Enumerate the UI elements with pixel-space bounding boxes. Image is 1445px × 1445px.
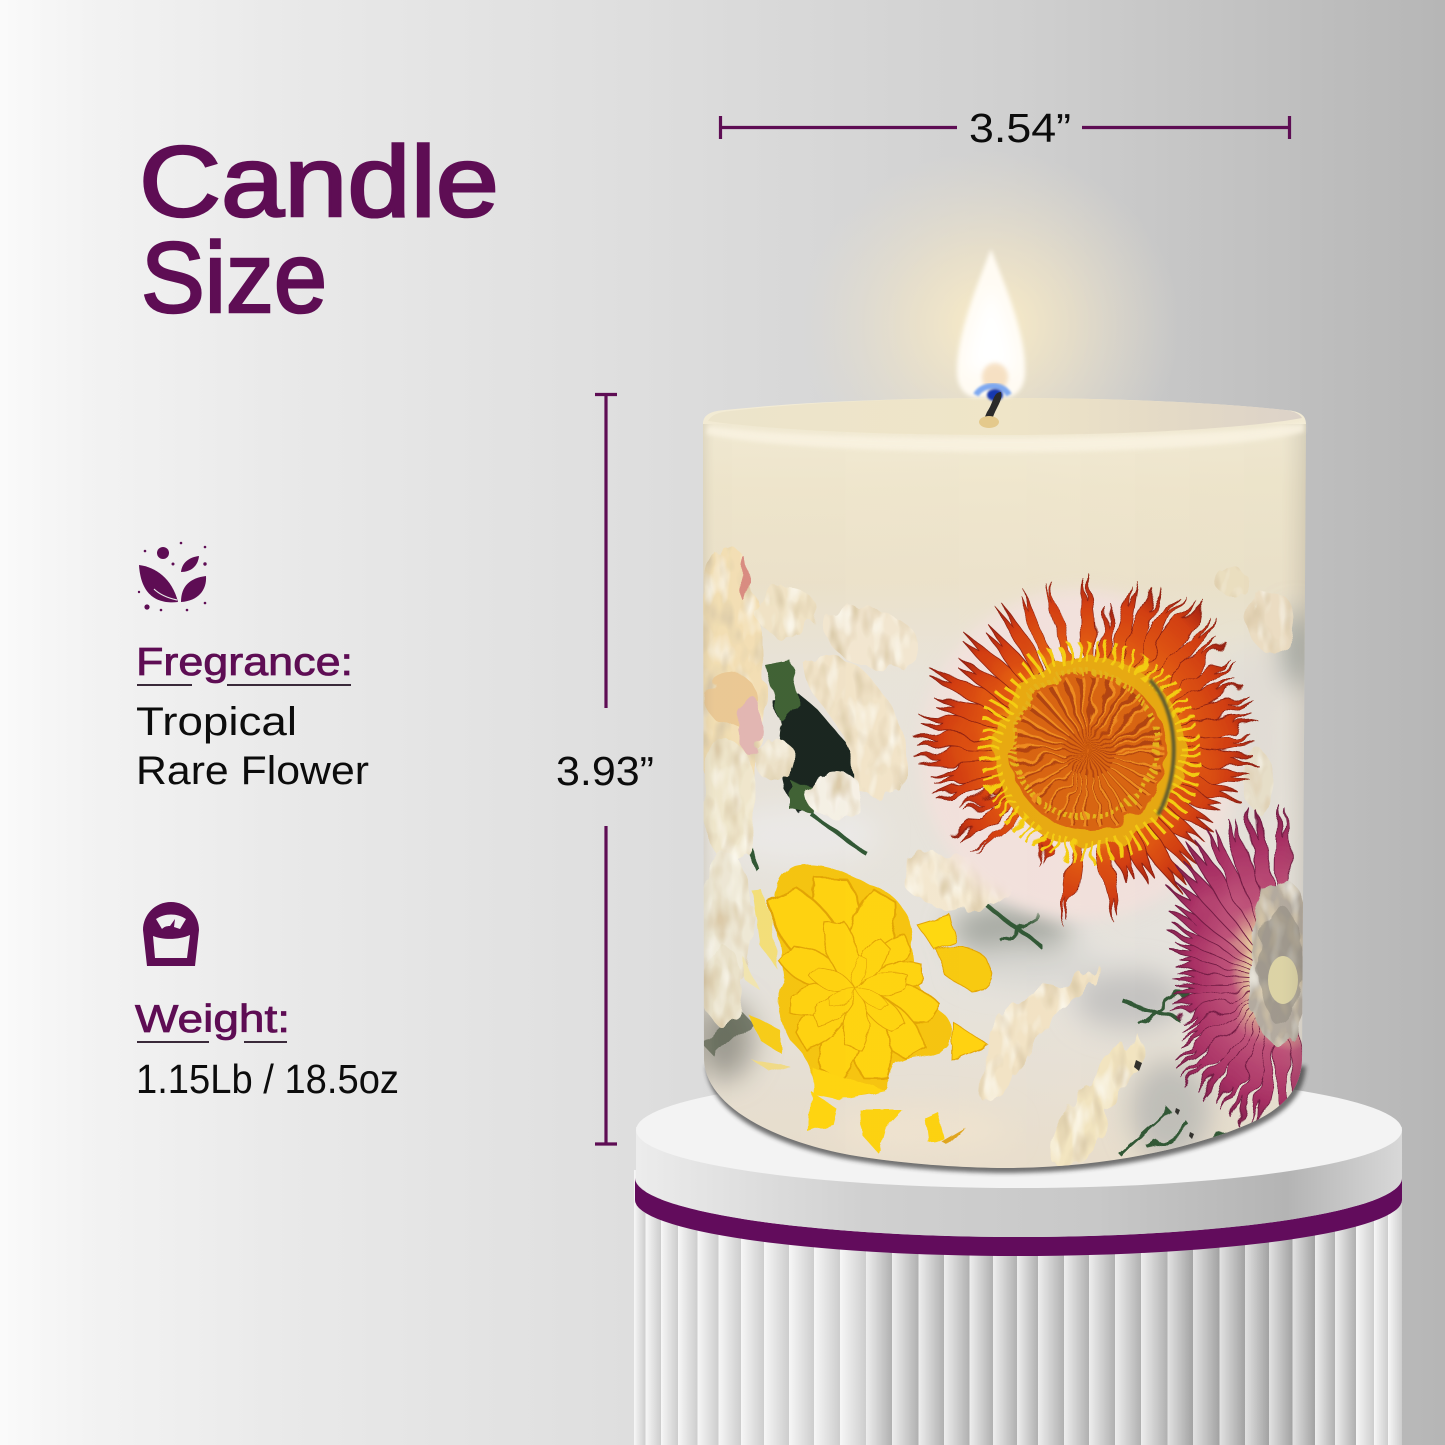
- candle rim highlight: [706, 423, 1304, 452]
- width dimension: [720, 105, 1290, 151]
- cream flowers: [692, 545, 1296, 1165]
- candle side shading: [703, 424, 1306, 1168]
- title: Candle: [139, 126, 499, 238]
- orange flower: [909, 572, 1260, 927]
- pedestal side: [636, 1127, 1402, 1237]
- specks: [1134, 1060, 1194, 1139]
- pedestal purple band: [635, 1178, 1402, 1256]
- yellow ring: [995, 657, 1185, 847]
- candle body: [703, 398, 1306, 1168]
- magenta flower grey centre: [1248, 880, 1303, 1048]
- pressed flowers: [692, 545, 1316, 1165]
- green foliage: [708, 660, 1250, 1155]
- title: Size: [141, 222, 327, 334]
- yellow flower petals: [766, 876, 940, 1080]
- fragrance value: Rare Flower: [136, 749, 369, 793]
- left flower centre: [706, 558, 762, 755]
- fragrance value: Tropical: [136, 700, 297, 744]
- icon: weighing scale: [143, 902, 199, 966]
- dark ring edge: [1150, 680, 1174, 815]
- orange centre disc: [1011, 674, 1167, 830]
- height dimension: 3.93”: [556, 748, 654, 794]
- left edge flower: [703, 546, 768, 776]
- title: [139, 126, 499, 334]
- soft wax haze: [697, 610, 1310, 1160]
- pedestal top: [636, 1072, 1402, 1188]
- pedestal column flutes: [634, 1170, 1402, 1445]
- flame glow: [800, 150, 1180, 500]
- magenta flower: [1165, 804, 1303, 1128]
- orange petals: [909, 572, 1260, 927]
- width dimension: 3.54”: [969, 105, 1071, 151]
- centre and lower cream flowers: [904, 850, 1008, 913]
- yellow flower: [742, 864, 992, 1153]
- weight label: Weight:: [135, 998, 290, 1041]
- fragrance label: Fregrance:: [136, 641, 353, 684]
- flame: [957, 249, 1025, 428]
- dark green clump: [772, 695, 856, 815]
- wick: [984, 392, 1001, 419]
- fragrance value: [136, 700, 369, 793]
- candle top surface: [708, 398, 1302, 435]
- mid-left cream flowers: [757, 587, 817, 637]
- candle: [692, 398, 1316, 1168]
- icon: leaves: [138, 542, 207, 611]
- candle shadow: [706, 1066, 1306, 1173]
- weight value: 1.15Lb / 18.5oz: [136, 1056, 399, 1102]
- height dimension: [556, 394, 654, 1144]
